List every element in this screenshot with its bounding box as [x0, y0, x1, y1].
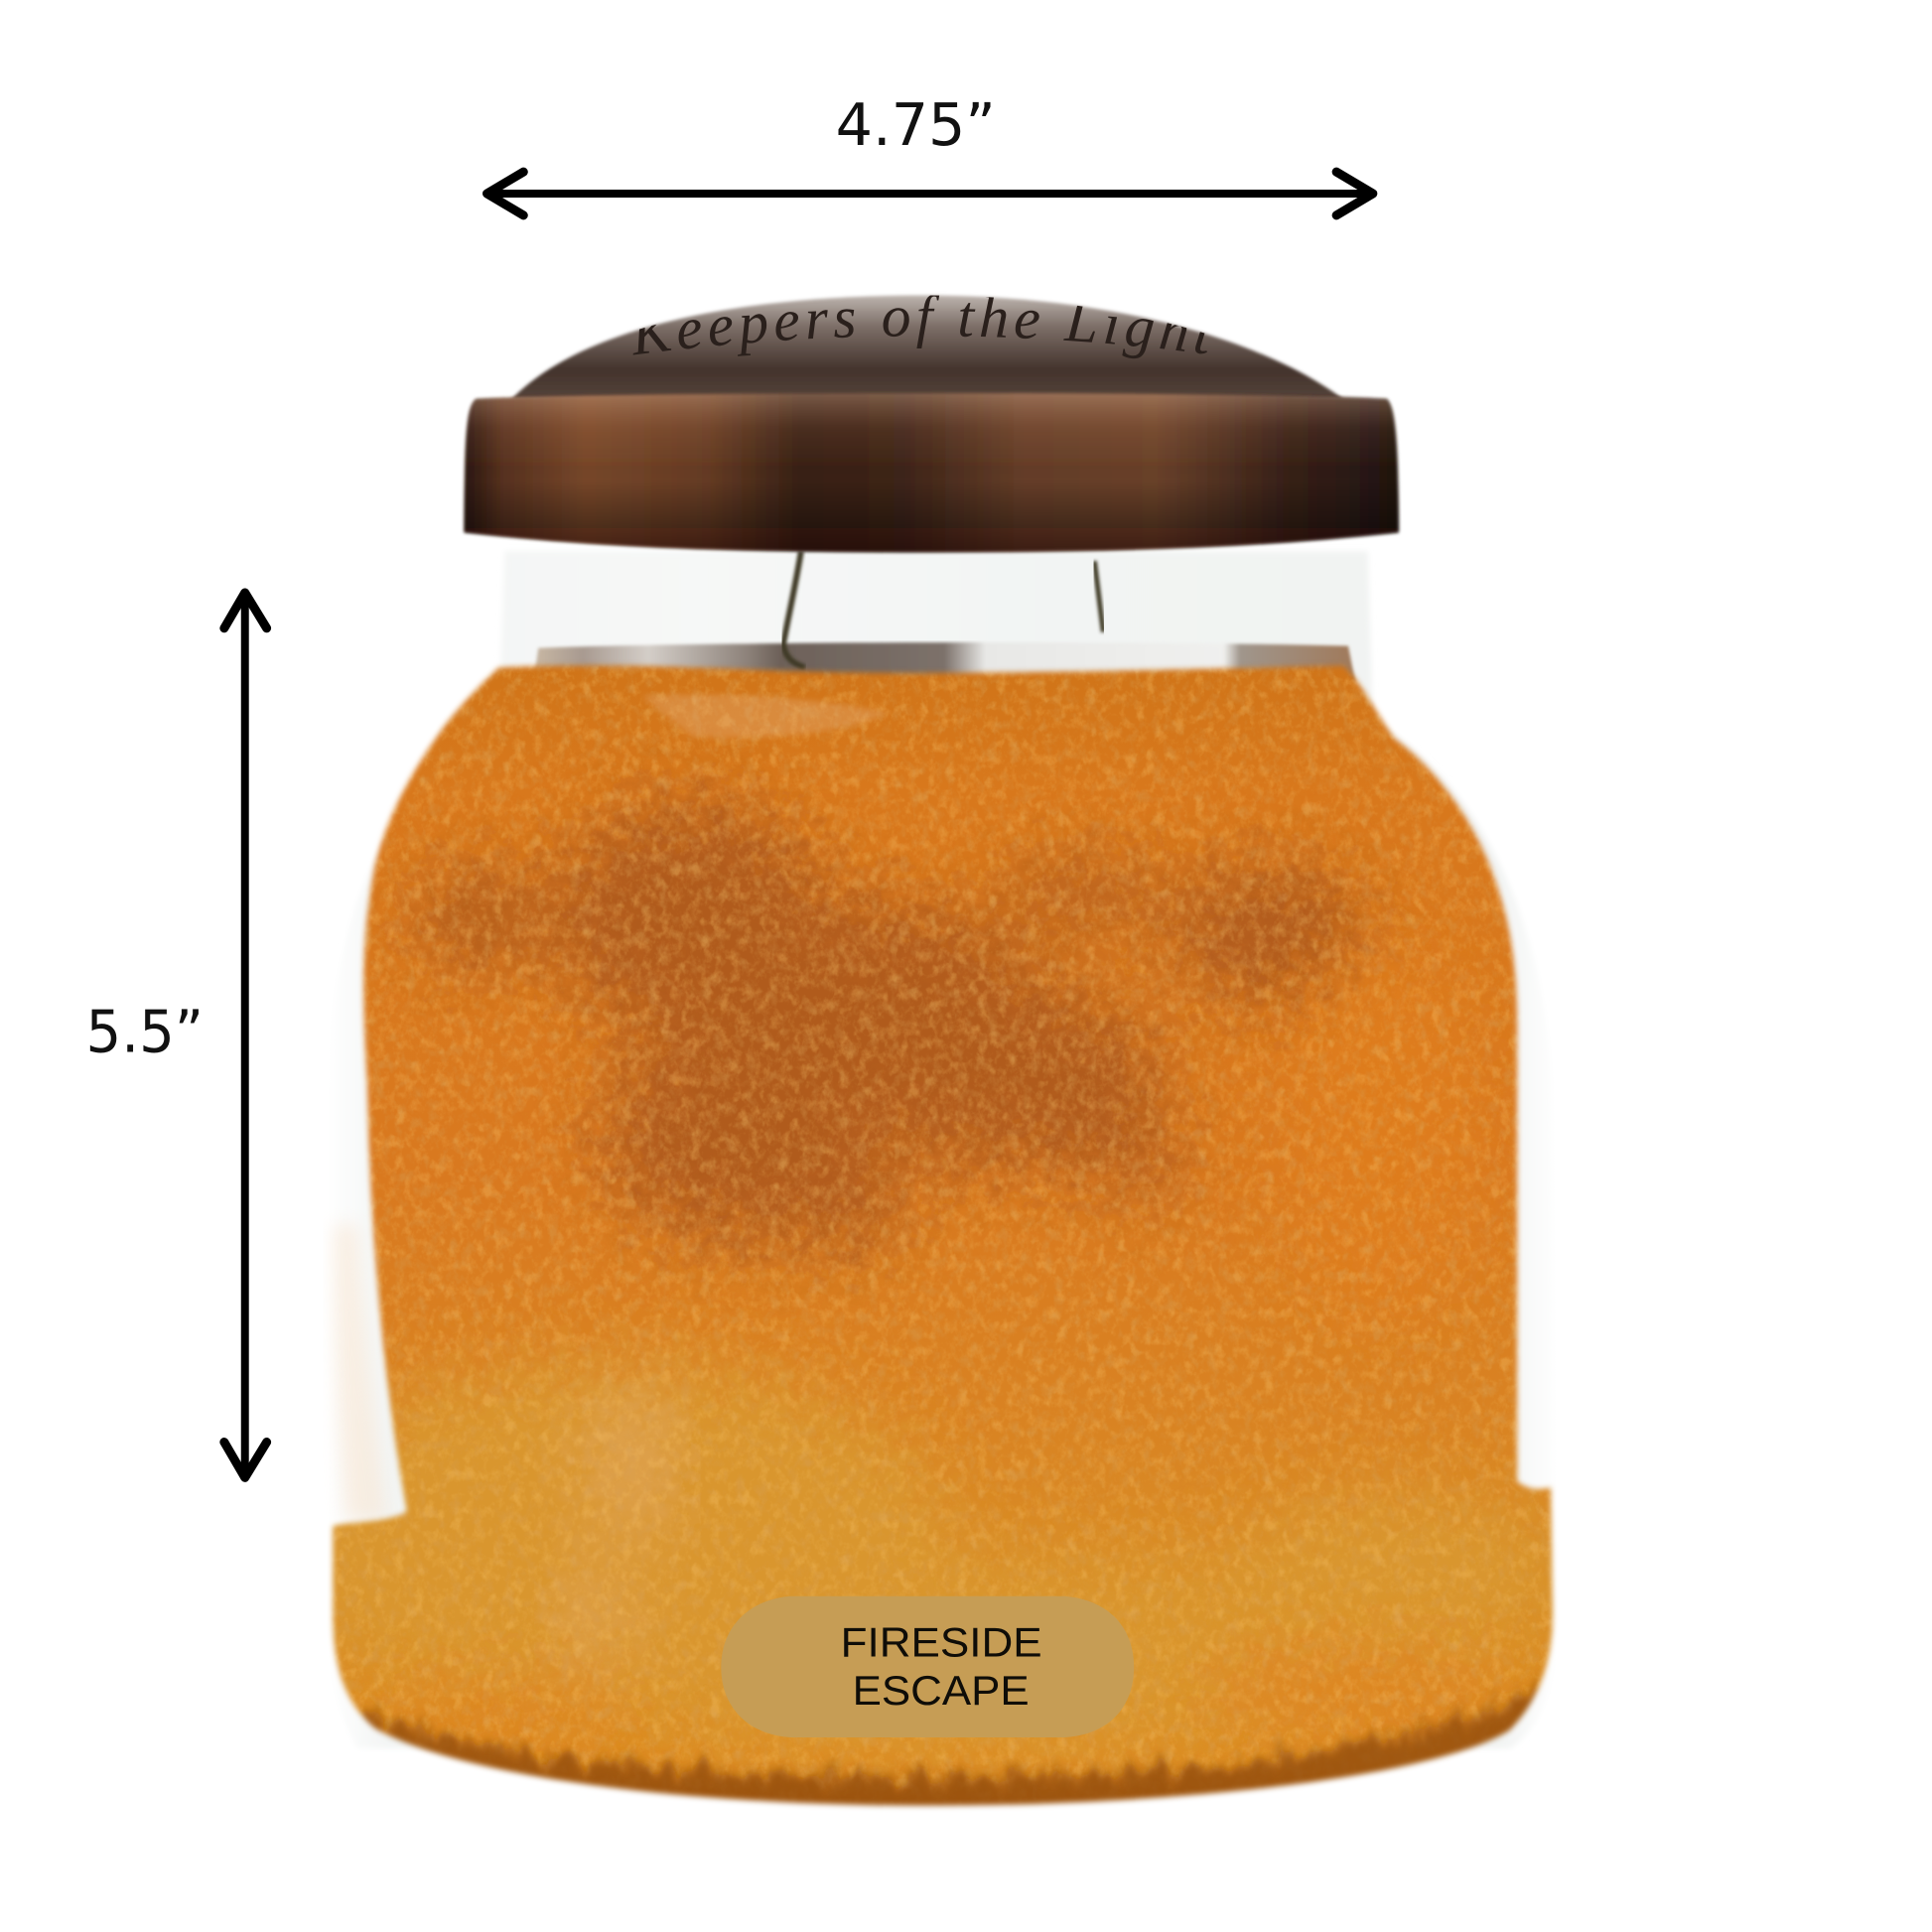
height arrow: [224, 593, 267, 1477]
wax base colour: [316, 652, 1571, 1818]
label text line 2: ESCAPE: [853, 1667, 1030, 1714]
width label: 4.75”: [836, 91, 996, 159]
wick: right: [1094, 561, 1103, 632]
lid dome: [510, 294, 1343, 399]
wax bottom shadow rim: [359, 1678, 1539, 1808]
glass jar shoulder and walls: [326, 551, 1559, 1748]
lid engraved text: Keepers of the Light: [633, 296, 1207, 359]
infographic canvas: [89, 101, 1557, 1811]
wick: left: [783, 551, 805, 668]
label text line 1: FIRESIDE: [841, 1618, 1042, 1665]
candle jar: [236, 294, 1557, 1811]
metal tin under the wicks: [533, 642, 1355, 681]
lid band: [465, 393, 1399, 552]
label: [721, 1596, 1134, 1737]
wax lighter yellow lower layer: [277, 1363, 1571, 1748]
glass wall warm reflection: [334, 1225, 387, 1521]
wax darker blotches: [416, 800, 1368, 1250]
wax bright orange patches: [498, 953, 1478, 1739]
wax speckle texture: [316, 652, 1571, 1818]
wax top pale smear: [642, 695, 889, 738]
height label: 5.5”: [86, 999, 204, 1066]
width arrow: [486, 172, 1373, 215]
wax pale patch: [558, 1383, 676, 1674]
wax body: [277, 652, 1571, 1828]
